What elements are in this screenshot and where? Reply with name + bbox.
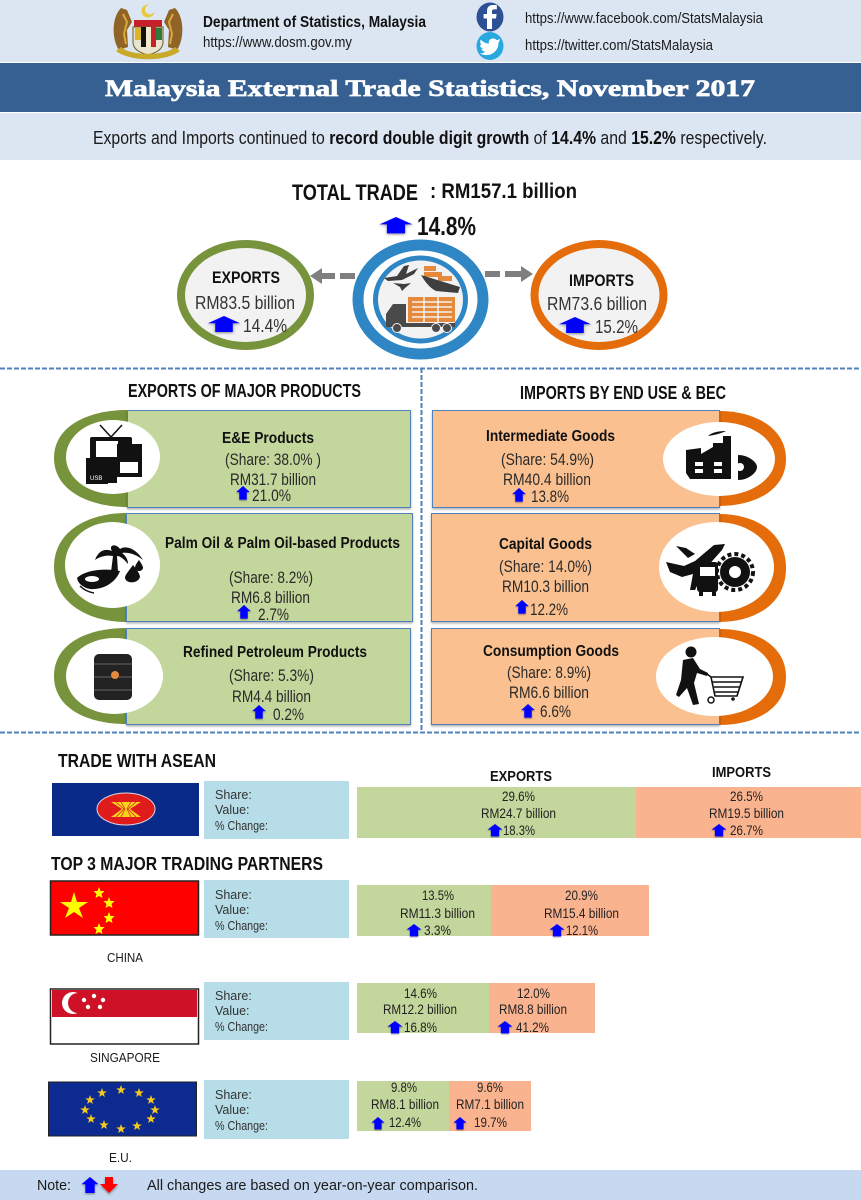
heading: department: Department of Statistics, Malaysia <box>203 14 426 31</box>
bar: imports: RM8.8 billion <box>499 1002 567 1017</box>
bar: imports <box>636 787 861 838</box>
bar: exports: 13.5% <box>422 888 454 903</box>
bar: exports: RM11.3 billion <box>400 906 475 921</box>
legend labels: Share: <box>215 989 252 1003</box>
icon: coat of arms <box>114 4 182 59</box>
card: capital goods: RM10.3 billion <box>502 578 589 596</box>
card: E&E: RM31.7 billion <box>230 471 316 489</box>
total trade change: 14.8% <box>417 211 476 241</box>
bar: exports: 12.4% <box>389 1115 421 1130</box>
bar: exports <box>357 983 489 1035</box>
bar: imports: 26.7% <box>730 823 763 838</box>
icon: electronics <box>86 425 142 484</box>
icon: twitter <box>476 32 504 60</box>
total trade change <box>380 211 476 241</box>
legend labels: % Change: <box>215 1020 268 1034</box>
card: palm oil: RM6.8 billion <box>231 589 310 607</box>
bar: imports <box>489 983 595 1035</box>
bar: exports <box>357 1080 449 1131</box>
card: petroleum: RM4.4 billion <box>232 688 311 706</box>
panel: exports circle: 14.4% <box>243 316 287 336</box>
card: E&E: E&E Products <box>222 430 314 447</box>
country label: E.U. <box>109 1150 132 1165</box>
note band: Note: <box>37 1177 71 1194</box>
note band: All changes are based on year-on-year comparison. <box>147 1177 478 1194</box>
summary band: Exports and Imports continued to record double digit growth of 14.4% and 15.2% respectively. <box>93 128 767 148</box>
card: palm oil: (Share: 8.2%) <box>229 569 313 587</box>
card: E&E: 21.0% <box>252 487 291 505</box>
legend labels <box>204 781 349 839</box>
bar: imports: RM7.1 billion <box>456 1097 524 1112</box>
heading: top 3 partners: TOP 3 MAJOR TRADING PARTNERS <box>51 854 323 874</box>
title band: Malaysia External Trade Statistics, November 2017 <box>105 76 755 101</box>
bar: exports: 29.6% <box>502 789 535 804</box>
total trade heading <box>292 180 577 205</box>
bar: exports: 14.6% <box>404 986 437 1001</box>
card: consumption goods: RM6.6 billion <box>509 684 589 702</box>
heading: EXPORTS OF MAJOR PRODUCTS <box>128 381 361 401</box>
icon: palm and oil <box>77 545 143 593</box>
bar: exports: RM8.1 billion <box>371 1097 439 1112</box>
bar: exports <box>357 885 491 938</box>
bar: exports: 3.3% <box>424 923 451 938</box>
card: E&E: (Share: 38.0% ) <box>225 451 321 469</box>
flag: China <box>50 881 198 935</box>
legend labels: Share: <box>215 1088 252 1102</box>
heading: trade with ASEAN: TRADE WITH ASEAN <box>58 751 216 771</box>
arrow: to imports <box>485 266 533 282</box>
bar: exports: RM12.2 billion <box>383 1002 457 1017</box>
icon: facebook <box>476 2 504 32</box>
panel: exports circle <box>181 244 310 346</box>
legend labels: Share: <box>215 888 252 902</box>
legend labels: Share: <box>215 788 252 802</box>
panel: imports circle: IMPORTS <box>569 271 634 290</box>
twitter link: https://twitter.com/StatsMalaysia <box>525 38 714 54</box>
bar: imports: 9.6% <box>477 1080 503 1095</box>
icon: down arrow <box>100 1177 118 1193</box>
card: capital goods: Capital Goods <box>499 536 592 553</box>
header band <box>0 0 861 62</box>
card: intermediate goods: (Share: 54.9%) <box>501 451 594 469</box>
card: palm oil <box>54 513 412 624</box>
card: consumption goods: 6.6% <box>540 703 571 721</box>
legend labels: Value: <box>215 1103 250 1117</box>
legend labels: Value: <box>215 903 250 917</box>
facebook link: https://www.facebook.com/StatsMalaysia <box>525 11 764 27</box>
bar: imports: 20.9% <box>565 888 598 903</box>
row: ASEAN <box>52 781 861 839</box>
column heading: exports: EXPORTS <box>490 768 552 785</box>
card: intermediate goods <box>432 410 786 508</box>
bar: imports: 19.7% <box>474 1115 507 1130</box>
icon: ship <box>421 266 460 293</box>
icon: oil barrel <box>94 654 132 700</box>
column heading: imports: IMPORTS <box>712 764 771 781</box>
bar: imports: 41.2% <box>516 1020 549 1035</box>
panel: imports circle: RM73.6 billion <box>547 294 647 314</box>
bar: exports: 16.8% <box>404 1020 437 1035</box>
icon: plane bus gear <box>666 544 753 596</box>
flag: Singapore <box>50 989 198 1044</box>
bar: exports: RM24.7 billion <box>481 806 556 821</box>
panel: imports circle <box>534 244 664 346</box>
card: E&E <box>54 410 410 508</box>
legend labels <box>204 982 349 1040</box>
legend labels: % Change: <box>215 1119 268 1133</box>
bar: exports <box>357 787 636 838</box>
panel: exports of major products <box>54 381 412 724</box>
panel: exports circle: EXPORTS <box>212 268 280 287</box>
bar: imports <box>449 1080 531 1131</box>
card: petroleum: 0.2% <box>273 706 304 724</box>
country label: CHINA <box>107 950 143 965</box>
legend labels <box>204 880 349 938</box>
bar: imports: 12.1% <box>566 923 598 938</box>
bar: exports: 18.3% <box>503 823 535 838</box>
card: capital goods: 12.2% <box>530 601 568 619</box>
icon: truck <box>386 297 455 332</box>
card: consumption goods: (Share: 8.9%) <box>507 664 591 682</box>
icon: up arrow <box>82 1177 98 1193</box>
icon: plane <box>384 265 418 291</box>
card: petroleum: Refined Petroleum Products <box>183 644 367 661</box>
total trade heading: : RM157.1 billion <box>430 180 577 203</box>
row: Singapore <box>50 982 595 1065</box>
bar: imports <box>491 885 649 938</box>
legend labels: % Change: <box>215 919 268 933</box>
icon: factory <box>686 431 757 480</box>
card: palm oil: 2.7% <box>258 606 289 624</box>
panel: exports circle: RM83.5 billion <box>195 293 295 313</box>
legend labels: % Change: <box>215 819 268 833</box>
legend labels <box>204 1080 349 1139</box>
flag: ASEAN <box>52 783 199 836</box>
total trade heading: TOTAL TRADE <box>292 180 418 205</box>
card: consumption goods <box>432 628 786 725</box>
icon: shopper with cart <box>676 646 743 705</box>
card: capital goods: (Share: 14.0%) <box>499 558 592 576</box>
card: intermediate goods: Intermediate Goods <box>486 428 615 445</box>
summary band <box>0 113 861 160</box>
card: petroleum <box>54 628 410 724</box>
card: intermediate goods: 13.8% <box>531 488 569 506</box>
card: consumption goods: Consumption Goods <box>483 643 619 660</box>
row: E.U. <box>48 1080 531 1165</box>
bar: imports: 12.0% <box>517 986 550 1001</box>
website: https://www.dosm.gov.my <box>203 35 353 51</box>
title band <box>0 63 861 112</box>
flag: E.U. <box>48 1082 196 1136</box>
note band <box>0 1170 861 1200</box>
bar: imports: 26.5% <box>730 789 763 804</box>
bar: exports: 9.8% <box>391 1080 417 1095</box>
bar: imports: RM19.5 billion <box>709 806 784 821</box>
card: intermediate goods: RM40.4 billion <box>503 471 591 489</box>
row: China <box>50 880 649 965</box>
panel: imports by end use <box>432 383 786 725</box>
bar: imports: RM15.4 billion <box>544 906 619 921</box>
card: capital goods <box>432 514 786 622</box>
card: palm oil: Palm Oil & Palm Oil-based Products <box>165 535 400 552</box>
icon: electronics: USB <box>90 476 102 482</box>
card: petroleum: (Share: 5.3%) <box>229 667 314 685</box>
country label: SINGAPORE <box>90 1050 160 1065</box>
panel: total trade circle <box>358 245 483 354</box>
heading: IMPORTS BY END USE & BEC <box>520 383 726 403</box>
arrow: to exports <box>310 268 355 284</box>
legend labels: Value: <box>215 1004 250 1018</box>
legend labels: Value: <box>215 803 250 817</box>
panel: imports circle: 15.2% <box>595 317 638 337</box>
